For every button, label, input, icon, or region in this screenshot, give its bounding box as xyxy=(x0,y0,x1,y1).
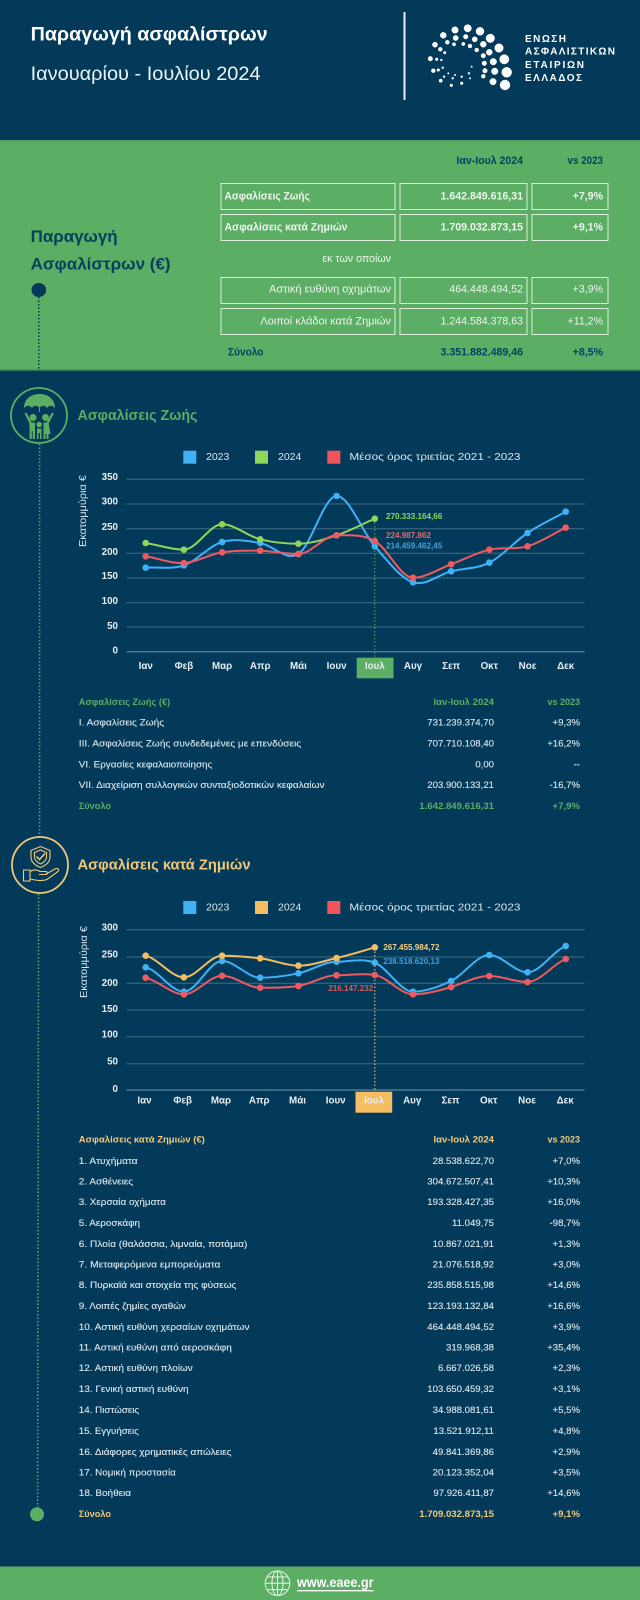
table rows: 10. Αστική ευθύνη χερσαίων οχημάτων xyxy=(79,1322,250,1333)
table rows: 16. Διάφορες χρηματικές απώλειες xyxy=(79,1447,232,1458)
heading: non-life insurance: Ασφαλίσεις κατά Ζημιών xyxy=(78,856,250,874)
table rows: +7,0% xyxy=(553,1156,580,1167)
timeline dotted connector xyxy=(38,444,40,1507)
row: life insurance: 1.642.849.616,31 xyxy=(441,190,523,202)
x axis labels: Νοε xyxy=(518,1096,536,1106)
table rows: 464.448.494,52 xyxy=(427,1322,494,1333)
x axis labels: Ιαν xyxy=(137,1096,152,1106)
table rows: +5,5% xyxy=(553,1405,580,1416)
table total: +7,9% xyxy=(553,801,580,812)
table rows: 12. Αστική ευθύνη πλοίων xyxy=(79,1363,193,1374)
y axis labels: 0 xyxy=(113,1084,119,1095)
legend: non-life chart: 2023 xyxy=(206,901,230,913)
heading: life insurance: Ασφαλίσεις Ζωής xyxy=(78,407,198,424)
table rows: +14,6% xyxy=(547,1280,580,1291)
table rows: +2,3% xyxy=(553,1363,580,1374)
table rows: 2. Ασθένειες xyxy=(79,1177,133,1188)
table rows: 319.968,38 xyxy=(446,1343,494,1354)
row: non-life insurance: Ασφαλίσεις κατά Ζημιών xyxy=(224,222,348,234)
y axis labels: 50 xyxy=(107,621,119,632)
icon: umbrella and family xyxy=(11,388,67,443)
y axis title: Εκατομμύρια € xyxy=(77,475,89,547)
table rows: 235.858.515,98 xyxy=(427,1280,494,1291)
table header xyxy=(79,1134,580,1146)
legend: life chart xyxy=(183,451,521,464)
table rows: +2,9% xyxy=(553,1447,580,1458)
row: total xyxy=(228,346,604,358)
x axis labels: Οκτ xyxy=(480,1096,498,1106)
series: three-year average xyxy=(142,524,569,581)
y axis labels: 300 xyxy=(102,496,119,508)
row: total: Σύνολο xyxy=(228,346,264,358)
y axis labels xyxy=(102,472,119,656)
y axis labels: 200 xyxy=(102,978,119,989)
x axis labels xyxy=(139,661,575,672)
table header: vs 2023 xyxy=(548,1135,580,1146)
table rows: 0,00 xyxy=(475,759,494,770)
line chart: life insurance xyxy=(77,472,584,678)
x axis labels: Απρ xyxy=(250,661,271,672)
x axis labels: Ιουν xyxy=(327,661,347,672)
value labels: july xyxy=(386,512,443,550)
row: motor liability: +3,9% xyxy=(573,284,604,296)
row: other non-life xyxy=(260,316,604,328)
timeline end dot xyxy=(30,1507,44,1521)
table rows: 5. Αεροσκάφη xyxy=(79,1218,140,1229)
row: motor liability xyxy=(269,284,604,296)
y axis labels: 150 xyxy=(102,571,119,582)
table rows: -- xyxy=(574,759,580,770)
row: other non-life: 1.244.584.378,63 xyxy=(441,316,523,328)
table rows: +3,1% xyxy=(553,1384,580,1395)
row: motor liability: Αστική ευθύνη οχημάτων xyxy=(269,284,391,296)
value labels: july: 270.333.164,66 xyxy=(386,512,443,521)
x axis labels: Ιουν xyxy=(326,1096,346,1106)
summary table boxes xyxy=(221,184,608,334)
row: life insurance xyxy=(224,190,604,202)
website link: www.eaee.gr xyxy=(296,1575,374,1590)
panel heading: Παραγωγή xyxy=(31,227,118,246)
icon: shield over hand xyxy=(12,837,68,893)
panel heading: Ασφαλίστρων (€) xyxy=(31,254,171,274)
row: motor liability: 464.448.494,52 xyxy=(449,284,523,296)
y axis labels: 300 xyxy=(102,922,119,934)
x axis labels: Σεπ xyxy=(442,661,461,672)
x axis labels: Φεβ xyxy=(175,661,193,672)
table rows: +3,9% xyxy=(553,1322,580,1333)
table rows: 6.667.026,58 xyxy=(438,1363,494,1374)
table rows: 20.123.352,04 xyxy=(433,1468,495,1479)
table rows: 123.193.132,84 xyxy=(427,1301,495,1312)
table rows: +3,5% xyxy=(553,1468,580,1479)
x axis labels: Οκτ xyxy=(481,661,499,672)
table rows: 21.076.518,92 xyxy=(433,1260,494,1271)
value labels: july: 224.987.862 xyxy=(386,531,432,540)
series: 2023 xyxy=(142,493,569,586)
row: non-life insurance xyxy=(224,222,604,234)
table rows: 193.328.427,35 xyxy=(427,1197,494,1208)
x axis labels: Ιαν xyxy=(139,661,153,672)
of which label: εκ των οποίων xyxy=(322,253,391,265)
table total xyxy=(79,1509,580,1520)
table rows: 15. Εγγυήσεις xyxy=(79,1426,139,1437)
x axis labels: Αυγ xyxy=(404,661,423,672)
x axis labels: Αυγ xyxy=(403,1096,422,1106)
x axis labels: Σεπ xyxy=(441,1096,460,1106)
row: life insurance: Ασφαλίσεις Ζωής xyxy=(224,190,310,202)
row: life insurance: +7,9% xyxy=(573,190,604,202)
row: other non-life: Λοιποί κλάδοι κατά Ζημιών xyxy=(260,316,391,328)
table rows: 11. Αστική ευθύνη από αεροσκάφη xyxy=(79,1343,232,1354)
value labels: july: 267.455.984,72 xyxy=(383,943,440,952)
table rows: 304.672.507,41 xyxy=(427,1177,494,1188)
logo text: ΑΣΦΑΛΙΣΤΙΚΩΝ xyxy=(525,46,615,58)
legend: non-life chart: Μέσος όρος τριετίας 2021 - 2023 xyxy=(349,901,521,913)
table rows: 28.538.622,70 xyxy=(433,1156,494,1167)
x axis labels: Απρ xyxy=(249,1096,270,1106)
table total: +9,1% xyxy=(553,1509,580,1520)
series: three-year average xyxy=(142,956,569,998)
legend: non-life chart: 2024 xyxy=(278,901,302,913)
table rows: +9,3% xyxy=(553,718,580,729)
y axis labels: 100 xyxy=(102,596,119,607)
logo text xyxy=(525,34,615,84)
table rows: +35,4% xyxy=(547,1343,580,1354)
icon: globe xyxy=(265,1571,290,1596)
row: total: +8,5% xyxy=(573,346,604,358)
header xyxy=(31,12,615,100)
table total: Σύνολο xyxy=(79,801,111,812)
series: 2023 xyxy=(142,943,569,995)
table rows: 97.926.411,87 xyxy=(433,1488,494,1499)
table rows: 17. Νομική προστασία xyxy=(79,1468,176,1479)
panel heading xyxy=(31,227,171,274)
legend: life chart: 2023 xyxy=(206,451,230,463)
table rows: +10,3% xyxy=(547,1177,580,1188)
series: 2024 xyxy=(142,944,378,981)
table rows: +16,0% xyxy=(547,1197,580,1208)
y axis labels: 100 xyxy=(102,1030,119,1041)
table header: Ασφαλίσεις Ζωής (€) xyxy=(79,697,170,708)
table rows: 203.900.133,21 xyxy=(427,780,494,791)
summary column headers: vs 2023 xyxy=(568,155,603,167)
value labels: july: 216.147.232 xyxy=(328,984,374,993)
table rows: 731.239.374,70 xyxy=(427,718,494,729)
table rows: +1,3% xyxy=(553,1239,580,1250)
title: Παραγωγή ασφαλίστρων xyxy=(31,24,268,46)
table rows: 49.841.369,86 xyxy=(433,1447,494,1458)
legend: life chart: Μέσος όρος τριετίας 2021 - 2023 xyxy=(349,451,521,463)
y axis labels: 0 xyxy=(113,646,119,656)
table header: Ιαν-Ιουλ 2024 xyxy=(434,697,495,708)
row: non-life insurance: 1.709.032.873,15 xyxy=(441,222,523,234)
table rows: 14. Πιστώσεις xyxy=(79,1405,140,1416)
x axis labels: Δεκ xyxy=(557,661,575,672)
footer xyxy=(0,1566,640,1600)
table rows: 7. Μεταφερόμενα εμπορεύματα xyxy=(79,1260,221,1271)
table header: vs 2023 xyxy=(548,697,580,708)
table total xyxy=(79,801,580,812)
table rows: ΙΙΙ. Ασφαλίσεις Ζωής συνδεδεμένες με επενδύσεις xyxy=(79,738,302,749)
table rows: +3,0% xyxy=(553,1260,580,1271)
table rows: +16,6% xyxy=(547,1301,580,1312)
table total: 1.709.032.873,15 xyxy=(419,1509,495,1520)
logo xyxy=(428,25,615,90)
table rows: 6. Πλοία (θαλάσσια, λιμναία, ποτάμια) xyxy=(79,1239,247,1250)
table rows: 8. Πυρκαϊά και στοιχεία της φύσεως xyxy=(79,1280,237,1291)
logo mark xyxy=(428,25,512,90)
table: life insurance xyxy=(79,697,580,812)
table header: Ασφαλίσεις κατά Ζημιών (€) xyxy=(79,1135,205,1146)
x axis labels: Δεκ xyxy=(557,1096,574,1106)
panel: premium production summary xyxy=(0,140,640,371)
row: non-life insurance: +9,1% xyxy=(573,222,604,234)
x axis labels: Μαρ xyxy=(212,661,232,672)
table rows: 103.650.459,32 xyxy=(427,1384,494,1395)
row: other non-life: +11,2% xyxy=(568,316,604,328)
value labels: july: 214.459.462,45 xyxy=(386,542,443,550)
timeline start dot xyxy=(32,283,46,297)
x axis labels: Νοε xyxy=(519,661,537,672)
table rows: +14,6% xyxy=(547,1488,580,1499)
table rows: VΙΙ. Διαχείριση συλλογικών συνταξιοδοτικών κεφαλαίων xyxy=(79,780,325,791)
table total: 1.642.849.616,31 xyxy=(419,801,495,812)
table rows: 18. Βοήθεια xyxy=(79,1488,131,1499)
y axis title: Εκατομμύρια € xyxy=(78,926,90,998)
logo text: ΕΛΛΑΔΟΣ xyxy=(525,73,582,84)
line chart: non-life insurance xyxy=(78,922,584,1113)
x axis labels: Μάι xyxy=(289,1096,306,1106)
logo text: ΕΤΑΙΡΙΩΝ xyxy=(525,60,584,71)
legend: life chart: 2024 xyxy=(278,451,302,463)
y axis labels xyxy=(102,922,119,1095)
y axis labels: 200 xyxy=(102,547,119,558)
table header xyxy=(79,697,580,708)
x axis labels: Μαρ xyxy=(211,1096,231,1106)
series: 2024 xyxy=(142,515,378,553)
table rows: -16,7% xyxy=(550,780,580,791)
table rows: 13. Γενική αστική ευθύνη xyxy=(79,1384,189,1395)
x axis labels: Ιουλ xyxy=(365,661,385,672)
table rows: 3. Χερσαία οχήματα xyxy=(79,1197,166,1208)
y axis labels: 150 xyxy=(102,1004,119,1015)
table rows: 13.521.912,11 xyxy=(433,1426,494,1437)
table rows xyxy=(79,1156,580,1499)
row: total: 3.351.882.489,46 xyxy=(441,346,523,358)
table rows: 1. Ατυχήματα xyxy=(79,1156,138,1167)
summary column headers xyxy=(456,155,603,167)
x axis labels xyxy=(137,1096,574,1106)
table rows: +4,8% xyxy=(553,1426,580,1437)
subtitle: Ιανουαρίου - Ιουλίου 2024 xyxy=(31,64,261,85)
july highlight xyxy=(357,519,394,678)
y axis labels: 350 xyxy=(102,472,119,483)
table rows: +16,2% xyxy=(547,738,580,749)
table rows: VΙ. Εργασίες κεφαλαιοποίησης xyxy=(79,759,213,770)
table rows xyxy=(79,718,580,791)
y axis labels: 250 xyxy=(102,950,119,960)
value labels: july: 238.518.620,13 xyxy=(383,957,440,966)
table: non-life insurance xyxy=(79,1134,580,1520)
y axis labels: 250 xyxy=(102,522,119,533)
x axis labels: Ιουλ xyxy=(364,1096,384,1106)
table header: Ιαν-Ιουλ 2024 xyxy=(434,1135,495,1146)
summary column headers: Ιαν-Ιουλ 2024 xyxy=(456,155,523,167)
table rows: 10.867.021,91 xyxy=(433,1239,494,1250)
logo text: ΕΝΩΣΗ xyxy=(525,34,566,45)
y axis labels: 50 xyxy=(107,1056,119,1068)
legend: non-life chart xyxy=(183,901,521,914)
table rows: -98,7% xyxy=(550,1218,580,1229)
x axis labels: Μάι xyxy=(290,661,307,672)
x axis labels: Φεβ xyxy=(173,1096,192,1106)
table total: Σύνολο xyxy=(79,1509,111,1520)
table rows: 9. Λοιπές ζημίες αγαθών xyxy=(79,1301,186,1312)
july highlight xyxy=(356,948,392,1113)
table rows: 34.988.081,61 xyxy=(433,1405,494,1416)
table rows: 11.049,75 xyxy=(452,1218,494,1229)
table rows: Ι. Ασφαλίσεις Ζωής xyxy=(79,718,164,729)
table rows: 707.710.108,40 xyxy=(427,738,494,749)
value labels: july xyxy=(328,943,440,993)
